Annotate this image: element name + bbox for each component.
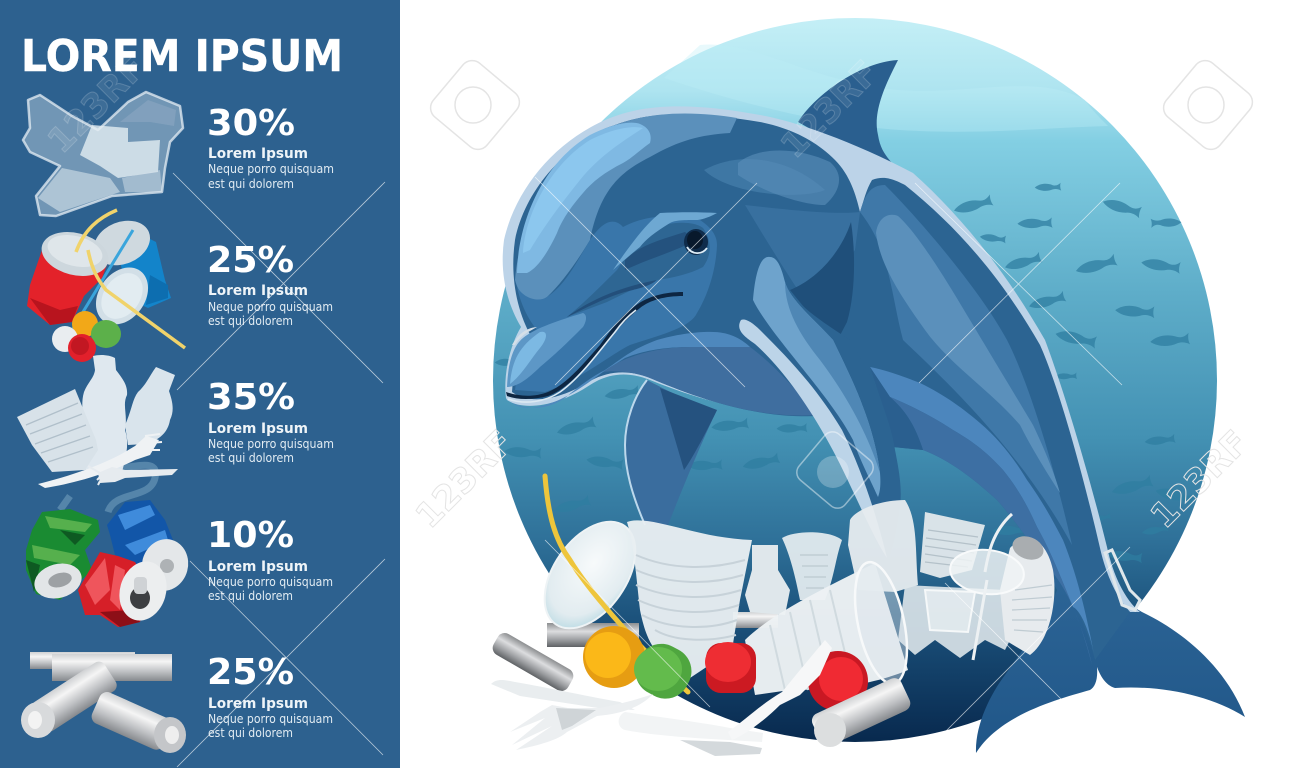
sideways ribbed cup — [745, 563, 908, 695]
far flipper — [625, 380, 717, 525]
icon: bottles, cup and forks — [17, 355, 178, 512]
watermark: 123RF marks — [40, 48, 1257, 536]
stat: 35%: 35% — [207, 377, 295, 418]
stat: 25%: Neque porro quisquam — [208, 300, 333, 314]
stat: 35%: Neque porro quisquam — [208, 437, 334, 451]
stat: 35%: Lorem Ipsum — [208, 421, 308, 437]
red cap right — [808, 651, 868, 711]
stat: 10% — [207, 515, 333, 603]
right can and ribs — [1000, 539, 1054, 655]
stat: 10%: Lorem Ipsum — [208, 559, 308, 575]
jaw — [510, 332, 750, 408]
watermark: cross lines — [173, 173, 1130, 767]
tail — [976, 540, 1245, 753]
melon shading — [515, 114, 737, 301]
stat: 25%: Lorem Ipsum — [208, 283, 308, 299]
fork: handle back — [491, 680, 635, 710]
handle at tail — [1105, 550, 1140, 610]
silver tube back — [547, 623, 639, 647]
watermark: 123RF marks: 123RF — [1143, 423, 1256, 536]
watermark: 123RF marks: 123RF — [40, 48, 153, 161]
clear lid — [948, 546, 1026, 598]
grey tube left — [490, 630, 576, 694]
stat: 30%: est qui dolorem — [208, 177, 294, 191]
stat: 30%: 30% — [207, 103, 295, 144]
watermark: 123RF marks: 123RF — [773, 53, 886, 166]
cheek — [515, 216, 717, 392]
icon: plastic bag — [23, 92, 183, 216]
stat: 10%: est qui dolorem — [208, 589, 293, 603]
plastic trash pile — [490, 476, 1140, 756]
dark flipper shadow — [790, 222, 854, 345]
stat: 35% — [207, 377, 334, 465]
near flipper — [753, 257, 901, 560]
stat: 25% second: Lorem Ipsum — [208, 696, 308, 712]
red cap — [705, 642, 756, 693]
sidebar panel — [0, 0, 400, 768]
yellow straw — [545, 476, 688, 692]
icon: cups, straws and caps — [27, 210, 185, 362]
stat: 25% second: est qui dolorem — [208, 726, 293, 740]
icon: aluminium tubes — [21, 652, 186, 753]
ocean circle — [493, 18, 1217, 742]
lower body band — [870, 367, 1095, 660]
silver tube right — [809, 675, 913, 749]
stat: 30%: Lorem Ipsum — [208, 146, 308, 162]
brow — [613, 212, 717, 270]
eye socket — [567, 223, 710, 317]
fork: upright — [728, 640, 832, 740]
mouth line — [506, 292, 683, 399]
stat: 25%: est qui dolorem — [208, 314, 293, 328]
stat: 30% — [207, 103, 334, 191]
fork: tines left — [510, 694, 653, 750]
green cap — [627, 635, 700, 707]
fork: lower — [619, 712, 763, 742]
stat: 10%: Neque porro quisquam — [208, 575, 333, 589]
school of fish — [495, 183, 1196, 564]
eye — [684, 229, 708, 255]
beak top — [507, 313, 586, 387]
dolphin — [503, 60, 1245, 753]
icon: crushed cans — [26, 500, 194, 627]
stat: 25%: 25% — [207, 240, 294, 281]
shoulder shade — [704, 159, 825, 195]
stat: 30%: Neque porro quisquam — [208, 162, 334, 176]
body main — [512, 114, 1130, 660]
stat: 25% — [207, 240, 333, 328]
chest — [603, 347, 819, 416]
translucent bag — [898, 585, 1020, 658]
stat: 25% second — [207, 652, 333, 740]
clear lid left — [526, 505, 654, 645]
stat: 25% second: 25% — [207, 652, 294, 693]
dorsal fin — [798, 60, 898, 163]
stat: 25% second: Neque porro quisquam — [208, 712, 333, 726]
stat: 10%: 10% — [207, 515, 294, 556]
stat: 35%: est qui dolorem — [208, 451, 294, 465]
watermark: 123RF marks: 123RF — [408, 423, 521, 536]
back cups and bottle — [848, 500, 918, 592]
title: LOREM IPSUM — [21, 31, 343, 82]
orange cap — [583, 626, 645, 688]
back stripes — [860, 185, 1072, 545]
body outline — [503, 106, 1140, 612]
large ribbed cup — [627, 520, 752, 678]
